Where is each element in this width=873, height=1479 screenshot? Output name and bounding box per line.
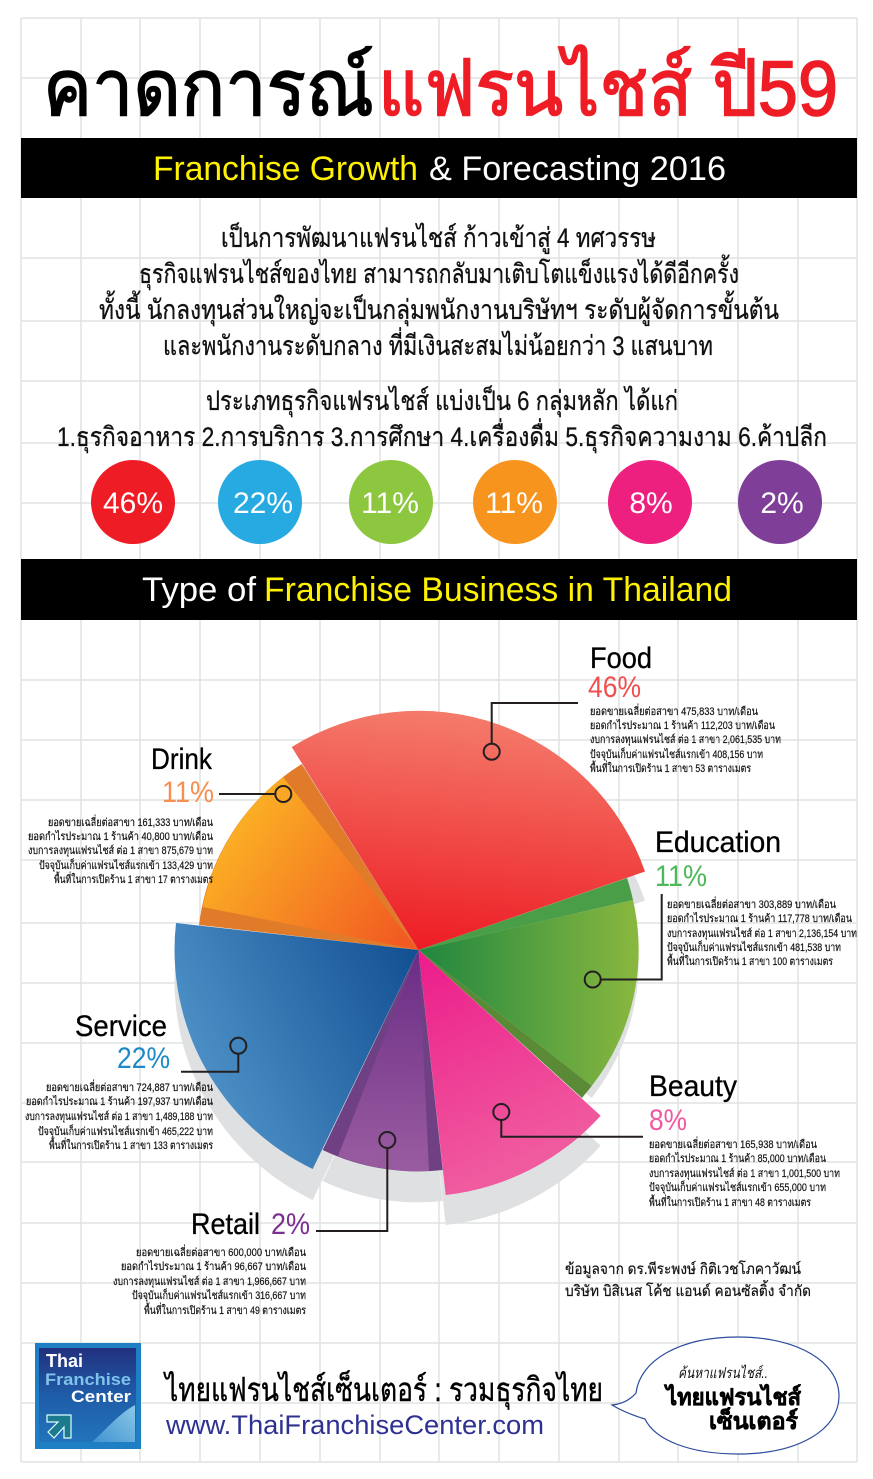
percentage circles: 11% bbox=[361, 487, 419, 520]
logo: Thai Franchise Center: Thai bbox=[46, 1351, 83, 1371]
callout: Drink: งบการลงทุนแฟรนไชส์ ต่อ 1 สาขา 875,679 บาท bbox=[28, 844, 213, 857]
pie chart bbox=[175, 711, 645, 1225]
callout: Drink: ยอดขายเฉลี่ยต่อสาขา 161,333 บาท/เดือน bbox=[48, 814, 213, 829]
callout: Drink: ปัจจุบันเก็บค่าแฟรนไชส์แรกเข้า 133,429 บาท bbox=[39, 858, 213, 872]
callout: Service: งบการลงทุนแฟรนไชส์ ต่อ 1 สาขา 1,489,188 บาท bbox=[25, 1110, 213, 1123]
callout: Retail: ยอดขายเฉลี่ยต่อสาขา 600,000 บาท/เดือน bbox=[136, 1244, 306, 1259]
speech bubble: ไทยแฟรนไชส์ bbox=[663, 1383, 802, 1410]
source credit: บริษัท บิสิเนส โค้ช แอนด์ คอนซัลติ้ง จำกัด bbox=[565, 1280, 811, 1300]
speech bubble bbox=[612, 1337, 839, 1454]
callout: Retail: งบการลงทุนแฟรนไชส์ ต่อ 1 สาขา 1,966,667 บาท bbox=[113, 1275, 306, 1288]
callout: Education: พื้นที่ในการเปิดร้าน 1 สาขา 100 ตารางเมตร bbox=[667, 953, 833, 968]
callout: Education bbox=[585, 826, 857, 988]
callout: Beauty: 8% bbox=[649, 1104, 687, 1137]
callout: Service bbox=[25, 1010, 246, 1152]
footer heading: ไทยแฟรนไชส์เซ็นเตอร์ : รวมธุรกิจไทย bbox=[163, 1370, 603, 1410]
percentage circles: 11% bbox=[485, 487, 543, 520]
title: คาดการณ์ bbox=[43, 44, 374, 132]
callout: Beauty bbox=[493, 1070, 840, 1209]
callout: Beauty: Beauty bbox=[649, 1070, 737, 1103]
percentage circles: 8% bbox=[629, 487, 673, 520]
logo: Thai Franchise Center: Center bbox=[71, 1387, 131, 1406]
percentage circles: 22% bbox=[233, 487, 293, 520]
banner: Franchise Growth & Forecasting 2016 bbox=[21, 138, 857, 198]
intro text block bbox=[99, 220, 779, 361]
callout: Service: ยอดกำไรประมาณ 1 ร้านค้า 197,937 บาท/เดือน bbox=[26, 1095, 213, 1108]
banner: Type of Franchise Business in Thailand: Franchise Business in Thailand bbox=[264, 571, 732, 609]
title bbox=[43, 44, 838, 132]
callout: Food bbox=[484, 642, 781, 775]
callout: Retail: Retail bbox=[191, 1208, 260, 1241]
callout: Service: 22% bbox=[117, 1042, 170, 1075]
intro text block: เป็นการพัฒนาแฟรนไชส์ ก้าวเข้าสู่ 4 ทศวรรษ bbox=[221, 220, 656, 254]
callout: Drink: พื้นที่ในการเปิดร้าน 1 สาขา 17 ตารางเมตร bbox=[54, 871, 213, 886]
callout: Service: Service bbox=[75, 1010, 167, 1043]
callout: Beauty: พื้นที่ในการเปิดร้าน 1 สาขา 48 ตารางเมตร bbox=[649, 1194, 811, 1209]
percentage circles: 2% bbox=[760, 487, 804, 520]
speech bubble: เซ็นเตอร์ bbox=[709, 1406, 799, 1434]
callout: Food: พื้นที่ในการเปิดร้าน 1 สาขา 53 ตารางเมตร bbox=[590, 760, 751, 775]
source credit bbox=[565, 1260, 811, 1300]
source credit: ข้อมูลจาก ดร.พีระพงษ์ กิติเวชโภคาวัฒน์ bbox=[565, 1260, 801, 1278]
banner: Type of Franchise Business in Thailand: Type of bbox=[142, 571, 257, 609]
callout: Food: Food bbox=[590, 642, 652, 675]
logo: Thai Franchise Center bbox=[35, 1343, 141, 1449]
percentage circles bbox=[91, 460, 822, 544]
title: แฟรนไชส์ ปี59 bbox=[378, 44, 838, 132]
callout: Food: ยอดกำไรประมาณ 1 ร้านค้า 112,203 บาท/เดือน bbox=[590, 719, 775, 732]
callout: Education: Education bbox=[655, 826, 781, 859]
callout: Food: งบการลงทุนแฟรนไชส์ ต่อ 1 สาขา 2,061,535 บาท bbox=[590, 733, 781, 746]
callout: Retail: ปัจจุบันเก็บค่าแฟรนไชส์แรกเข้า 316,667 บาท bbox=[132, 1288, 306, 1302]
callout: Food: 46% bbox=[588, 671, 641, 704]
callout: Education: 11% bbox=[655, 860, 707, 893]
franchise groups text bbox=[57, 383, 827, 454]
callout: Beauty: ยอดขายเฉลี่ยต่อสาขา 165,938 บาท/เดือน bbox=[649, 1136, 817, 1151]
callout: Drink bbox=[28, 743, 291, 886]
callout: Retail bbox=[113, 1132, 395, 1317]
franchise groups text: ประเภทธุรกิจแฟรนไชส์ แบ่งเป็น 6 กลุ่มหลัก ได้แก่ bbox=[206, 383, 678, 418]
callout: Drink: ยอดกำไรประมาณ 1 ร้านค้า 40,800 บาท/เดือน bbox=[28, 830, 213, 843]
callout: Service: พื้นที่ในการเปิดร้าน 1 สาขา 133 ตารางเมตร bbox=[49, 1137, 213, 1152]
callout: Beauty: ปัจจุบันเก็บค่าแฟรนไชส์แรกเข้า 655,000 บาท bbox=[649, 1180, 826, 1194]
callout: Retail: 2% bbox=[271, 1208, 310, 1241]
speech bubble: ค้นหาแฟรนไชส์.. bbox=[678, 1364, 768, 1382]
banner: Franchise Growth & Forecasting 2016: & Forecasting 2016 bbox=[429, 150, 726, 188]
banner: Franchise Growth & Forecasting 2016: Franchise Growth bbox=[153, 150, 418, 188]
callout: Drink: Drink bbox=[151, 743, 213, 776]
footer url: www.ThaiFranchiseCenter.com bbox=[165, 1410, 544, 1440]
callout: Food: ปัจจุบันเก็บค่าแฟรนไชส์แรกเข้า 408,156 บาท bbox=[590, 747, 763, 761]
callout: Service: ปัจจุบันเก็บค่าแฟรนไชส์แรกเข้า 465,222 บาท bbox=[38, 1124, 213, 1138]
logo: Thai Franchise Center: Franchise bbox=[45, 1370, 131, 1389]
callout: Retail: พื้นที่ในการเปิดร้าน 1 สาขา 49 ตารางเมตร bbox=[144, 1302, 306, 1317]
callout: Service: ยอดขายเฉลี่ยต่อสาขา 724,887 บาท/เดือน bbox=[46, 1079, 213, 1094]
percentage circles: 46% bbox=[103, 487, 163, 520]
callout: Drink: 11% bbox=[162, 776, 214, 809]
banner: Type of Franchise Business in Thailand bbox=[21, 559, 857, 620]
callout: Beauty: ยอดกำไรประมาณ 1 ร้านค้า 85,000 บาท/เดือน bbox=[649, 1152, 826, 1165]
callout: Food: ยอดขายเฉลี่ยต่อสาขา 475,833 บาท/เดือน bbox=[590, 703, 758, 718]
intro text block: และพนักงานระดับกลาง ที่มีเงินสะสมไม่น้อยกว่า 3 แสนบาท bbox=[163, 327, 713, 361]
callout: Education: ยอดขายเฉลี่ยต่อสาขา 303,889 บาท/เดือน bbox=[667, 896, 836, 911]
callout: Retail: ยอดกำไรประมาณ 1 ร้านค้า 96,667 บาท/เดือน bbox=[121, 1260, 306, 1273]
